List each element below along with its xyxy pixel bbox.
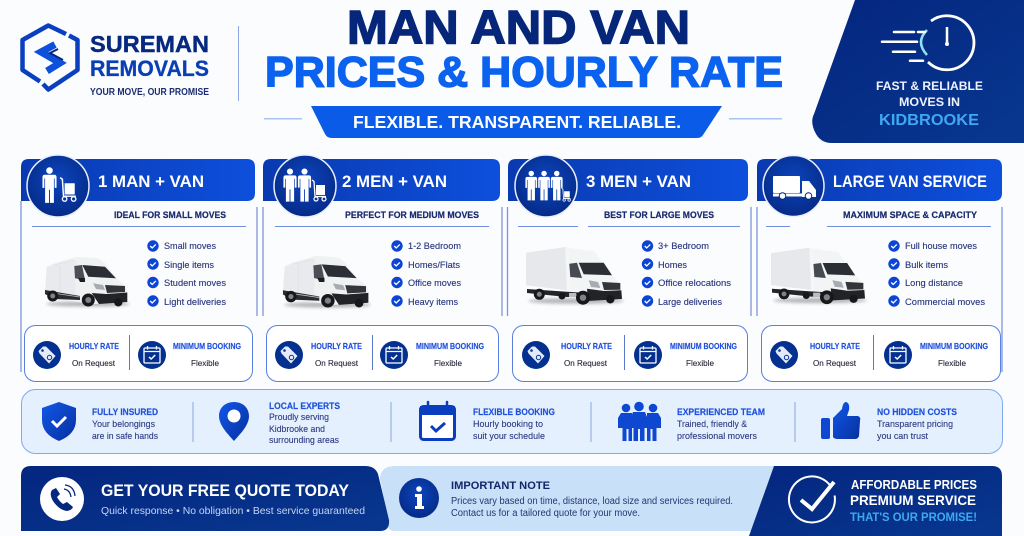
feature list: 1-2 Bedroom — [408, 241, 461, 252]
logo — [22, 26, 209, 98]
info box — [512, 326, 748, 382]
card header — [757, 159, 1002, 201]
note text: Prices vary based on time, distance, load size and services required. — [451, 496, 733, 507]
info box: Flexible — [434, 358, 462, 368]
benefit: flexible booking: suit your schedule — [473, 431, 545, 442]
benefit: fully insured: are in safe hands — [92, 431, 158, 442]
info box: HOURLY RATE — [810, 341, 860, 351]
benefit: flexible booking: Hourly booking to — [473, 419, 543, 430]
title: PRICES & HOURLY RATE — [265, 48, 783, 96]
panel: 3 men + van — [508, 155, 751, 382]
van image — [45, 257, 130, 307]
feature list: Large deliveries — [658, 297, 722, 308]
info box: HOURLY RATE — [69, 341, 119, 351]
truck image — [771, 248, 867, 304]
panel: promise — [749, 466, 1002, 536]
card title: 1 MAN + VAN — [98, 172, 204, 191]
info box — [266, 326, 498, 382]
feature list — [888, 240, 985, 308]
card subtitle: BEST FOR LARGE MOVES — [604, 210, 714, 221]
logo name: REMOVALS — [90, 56, 209, 81]
feature list: 3+ Bedroom — [658, 241, 709, 252]
feature list: Office relocations — [658, 278, 731, 289]
benefit: flexible booking: FLEXIBLE BOOKING — [473, 407, 555, 418]
benefit: fully insured: Your belongings — [92, 419, 155, 430]
info box: HOURLY RATE — [311, 341, 362, 351]
feature list: Small moves — [164, 241, 216, 252]
badge text: MOVES IN — [899, 95, 960, 109]
benefit: no hidden costs: Transparent pricing — [877, 419, 953, 430]
truck image — [526, 247, 624, 305]
panel: 2 men + van — [263, 155, 502, 382]
info box: Flexible — [686, 358, 714, 368]
card title: 3 MEN + VAN — [586, 172, 691, 191]
promise text: PREMIUM SERVICE — [850, 492, 976, 508]
panel: benefits strip — [22, 390, 1002, 454]
badge text: FAST & RELIABLE — [876, 79, 983, 93]
feature list: Commercial moves — [905, 297, 985, 308]
benefit: flexible booking — [420, 402, 555, 442]
card header — [508, 159, 748, 201]
benefit: no hidden costs: NO HIDDEN COSTS — [877, 407, 957, 418]
feature list: Single items — [164, 260, 214, 271]
info box: On Request — [72, 358, 116, 368]
feature list: Homes — [658, 260, 687, 271]
badge text — [876, 79, 983, 129]
benefit: experienced team: professional movers — [677, 431, 757, 442]
panel: free quote call to action — [21, 466, 389, 531]
benefit: local experts: Proudly serving — [269, 412, 329, 423]
panel: 1 man + van — [21, 155, 257, 382]
info box: MINIMUM BOOKING — [416, 341, 484, 351]
feature list: Heavy items — [408, 297, 458, 308]
info box: Flexible — [191, 358, 219, 368]
logo name — [90, 31, 209, 98]
tagline banner: FLEXIBLE. TRANSPARENT. RELIABLE. — [353, 112, 681, 132]
icon: two men with cart — [274, 155, 336, 217]
info box: HOURLY RATE — [561, 341, 612, 351]
feature list — [147, 240, 226, 308]
promise text — [850, 477, 977, 524]
icon: lorry — [763, 156, 824, 216]
card title: 2 MEN + VAN — [342, 172, 447, 191]
title — [265, 0, 783, 96]
logo name: YOUR MOVE, OUR PROMISE — [90, 87, 209, 98]
info box — [24, 326, 252, 382]
panel: location badge — [812, 0, 1024, 143]
note text — [451, 480, 733, 519]
feature list — [642, 240, 731, 308]
promise text: THAT'S OUR PROMISE! — [850, 510, 977, 524]
card header — [21, 159, 255, 201]
tagline banner — [311, 106, 722, 138]
feature list: Student moves — [164, 278, 226, 289]
feature list — [391, 240, 461, 308]
icon: one man with cart — [27, 155, 89, 217]
benefit: local experts — [219, 401, 340, 446]
benefit: local experts: LOCAL EXPERTS — [269, 401, 340, 412]
info box: On Request — [564, 358, 608, 368]
info box: On Request — [813, 358, 857, 368]
info box: MINIMUM BOOKING — [920, 341, 988, 351]
card title: LARGE VAN SERVICE — [833, 172, 987, 191]
info box: MINIMUM BOOKING — [670, 341, 737, 351]
feature list: Full house moves — [905, 241, 977, 252]
benefit: experienced team — [618, 402, 765, 442]
icon: fast clock — [882, 16, 974, 70]
benefit: experienced team: EXPERIENCED TEAM — [677, 407, 765, 418]
icon: phone — [40, 477, 84, 521]
card subtitle: IDEAL FOR SMALL MOVES — [114, 210, 226, 221]
benefit: no hidden costs: you can trust — [877, 431, 928, 442]
icon: check circle — [789, 476, 835, 522]
logo name: SUREMAN — [90, 31, 209, 57]
card subtitle: MAXIMUM SPACE & CAPACITY — [843, 210, 978, 221]
cta text: GET YOUR FREE QUOTE TODAY — [101, 482, 349, 500]
benefit: fully insured: FULLY INSURED — [92, 407, 158, 418]
info box: Flexible — [938, 358, 966, 368]
benefit: fully insured — [42, 402, 158, 442]
info box — [762, 326, 1000, 382]
benefit: experienced team: Trained, friendly & — [677, 419, 748, 430]
cta text: Quick response • No obligation • Best service guaranteed — [101, 505, 365, 517]
note text: Contact us for a tailored quote for your move. — [451, 508, 640, 519]
title: MAN AND VAN — [347, 0, 690, 54]
benefit: local experts: Kidbrooke and — [269, 424, 325, 435]
info box: MINIMUM BOOKING — [173, 341, 241, 351]
badge text: KIDBROOKE — [879, 112, 979, 129]
icon: info — [399, 478, 439, 518]
note text: IMPORTANT NOTE — [451, 480, 550, 492]
icon: three men with cart — [515, 155, 577, 217]
logo mark — [22, 26, 78, 90]
cta text — [101, 482, 365, 517]
panel: important note — [380, 466, 790, 531]
feature list: Bulk items — [905, 260, 948, 271]
panel: large van service — [757, 156, 1002, 382]
feature list: Homes/Flats — [408, 260, 460, 271]
benefit: local experts: surrounding areas — [269, 435, 339, 446]
van image — [283, 256, 371, 308]
card subtitle: PERFECT FOR MEDIUM MOVES — [345, 210, 479, 221]
benefit: no hidden costs — [821, 402, 957, 442]
feature list: Long distance — [905, 278, 963, 289]
feature list: Office moves — [408, 278, 461, 289]
card header — [263, 159, 500, 201]
feature list: Light deliveries — [164, 297, 226, 308]
promise text: AFFORDABLE PRICES — [851, 477, 977, 492]
info box: On Request — [315, 358, 359, 368]
